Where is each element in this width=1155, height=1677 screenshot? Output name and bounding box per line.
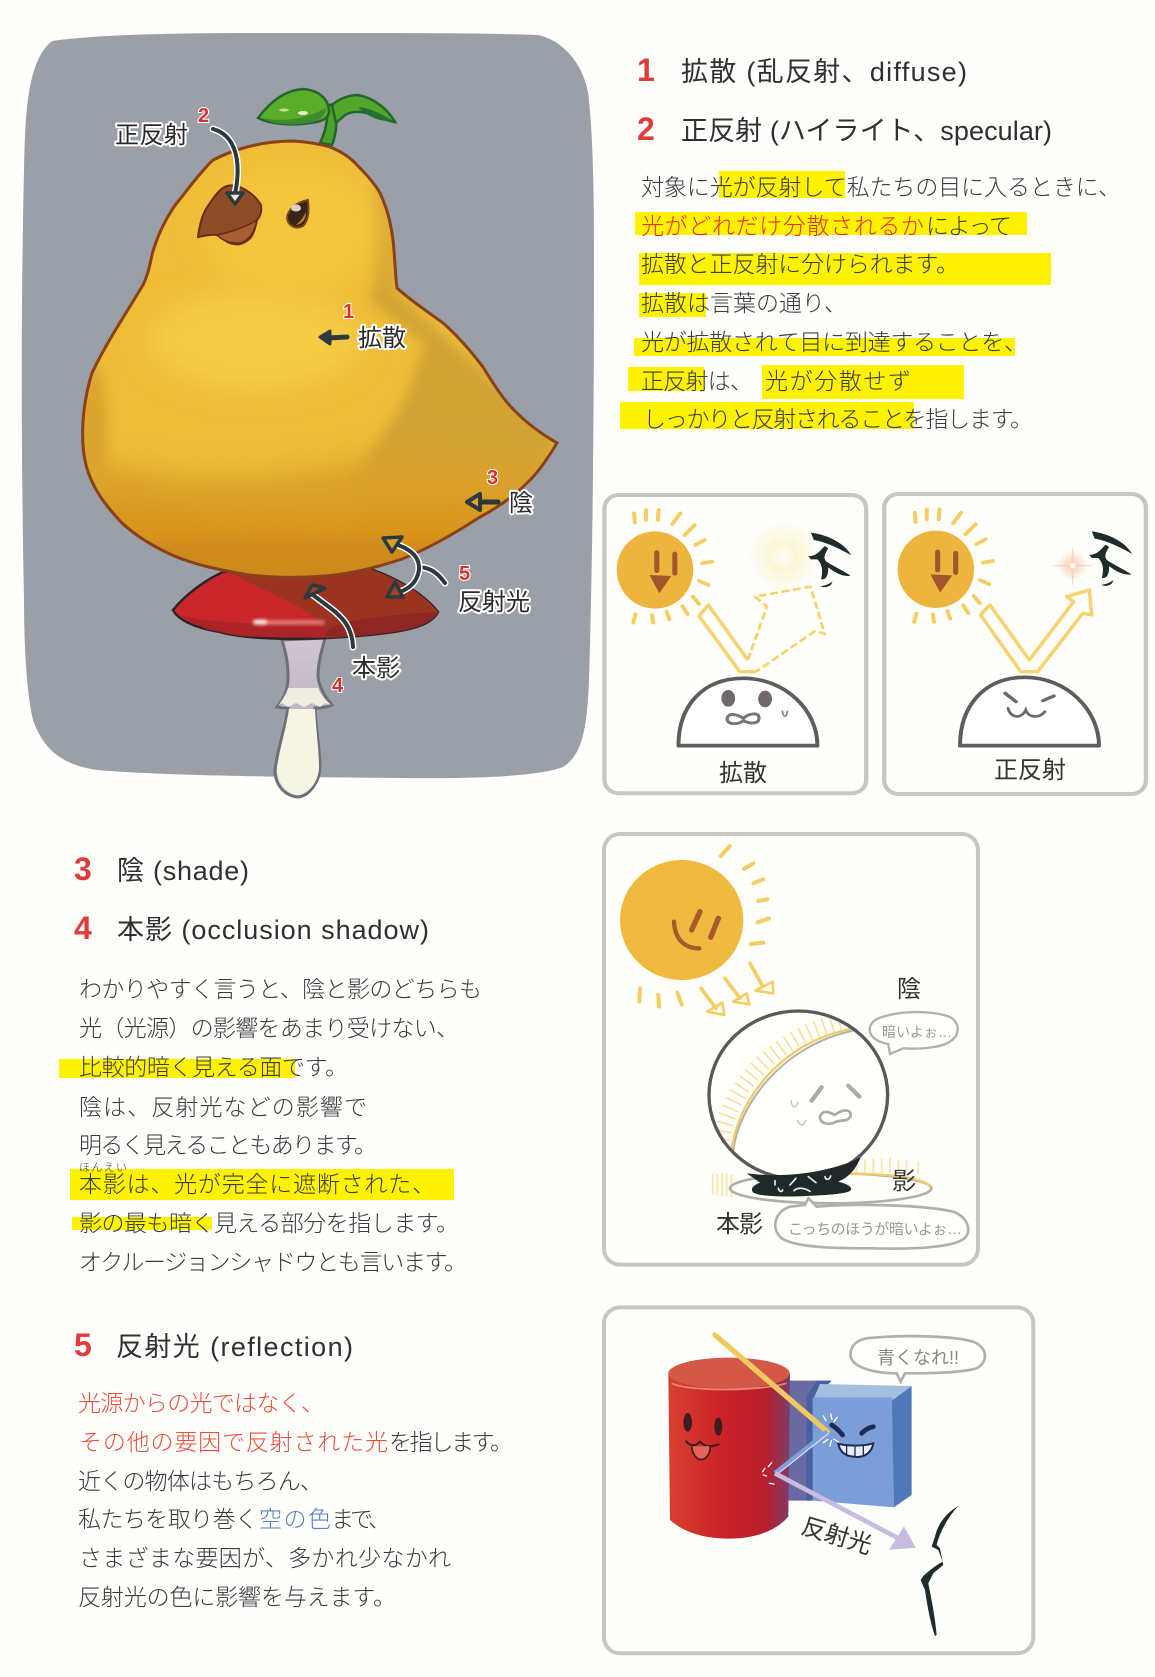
frame [604, 495, 866, 793]
label: 正反射 with arrow [115, 105, 243, 204]
caption: 正反射: 正反射 [994, 757, 1066, 784]
mushroom cap [173, 565, 445, 642]
label: 本影 with arrow [305, 585, 400, 697]
heading: 5 反射光: 5 [74, 1327, 92, 1363]
body text: オクルージョンシャドウとも言います。 [79, 1249, 467, 1275]
heading: 4 本影: 4 [74, 910, 92, 946]
floor shadow ellipse and hatching [713, 1158, 931, 1203]
heading: 3 陰: 陰 (shade) [117, 856, 249, 886]
panel: 正反射 diagram [884, 494, 1146, 794]
caption: 拡散: 拡散 [719, 760, 767, 787]
body text: 光が分散せず [765, 368, 911, 394]
text block: 陰 and 本影 [59, 851, 482, 1275]
label: 本影 with arrow: 4 [332, 675, 344, 697]
body text: によって [926, 213, 1012, 239]
label: 拡散 with arrow [320, 301, 406, 352]
body text: 正反射は、 [641, 368, 753, 394]
speech bubble: 青くなれ [850, 1336, 985, 1382]
body text: 対象に光が反射して私たちの目に入るときに、 [641, 174, 1121, 200]
bubble text: 青くなれ: 青くなれ!! [877, 1348, 959, 1368]
panel: 拡散 diagram [604, 495, 866, 793]
body text: 反射光の色に影響を与えます。 [78, 1584, 396, 1610]
sprout [258, 89, 395, 145]
light arrow with dashed scatter [699, 587, 825, 672]
body text: 拡散と正反射に分けられます。 [641, 251, 959, 277]
speech bubble: 暗いよぉ [870, 1012, 958, 1054]
dome character [960, 677, 1099, 746]
reflection arrow [981, 590, 1092, 672]
beak [198, 185, 261, 244]
label: 陰 with arrow [467, 467, 533, 517]
label: 正反射 with arrow: 正反射 [115, 122, 188, 149]
label: 影: 影 [892, 1168, 916, 1195]
gray backdrop [22, 33, 594, 778]
frame [884, 494, 1146, 794]
yellow highlights [620, 171, 1051, 429]
body text: 本影は、光が完全に遮断された、 [79, 1171, 435, 1197]
label: 拡散 with arrow: 1 [343, 301, 354, 323]
body text: 近くの物体はもちろん、 [78, 1468, 323, 1494]
body text: ほんえい [79, 1161, 127, 1174]
heading: 4 本影: 本影 (occlusion shadow) [117, 915, 429, 945]
body text [641, 174, 1121, 432]
diffuse glow [747, 520, 819, 593]
round character [709, 1011, 888, 1179]
heading: 3 陰 [74, 851, 249, 887]
label: 反射光 with arrows [383, 537, 530, 616]
occlusion shadow [747, 1157, 861, 1196]
body text: さまざまな要因が、多かれ少なかれ [79, 1545, 451, 1571]
heading: 1 拡散: 拡散 (乱反射、diffuse) [681, 57, 967, 87]
body text [78, 1390, 513, 1610]
yellow highlights [59, 1059, 454, 1230]
heading: 2 正反射: 正反射 (ハイライト、specular) [681, 116, 1052, 146]
label: 本影 with arrow: 本影 [352, 655, 400, 682]
label: 反射光 with arrows: 反射光 [458, 589, 530, 616]
eye [287, 200, 308, 228]
body text: 陰は、反射光などの影響で [79, 1094, 367, 1120]
body text: 空の色 [259, 1506, 331, 1532]
blue box [788, 1381, 912, 1507]
body text: まで、 [331, 1506, 391, 1532]
frame [604, 834, 978, 1265]
body text [79, 976, 482, 1275]
red cylinder [668, 1358, 790, 1539]
body text: 影の最も暗く見える部分を指します。 [79, 1210, 459, 1236]
eye icon [1089, 531, 1132, 586]
reflected light path [715, 1335, 915, 1549]
label: 拡散 with arrow: 拡散 [358, 325, 406, 352]
label: 陰 with arrow: 陰 [509, 490, 533, 517]
mushroom stem [275, 638, 332, 797]
body text: を指します。 [389, 1429, 513, 1455]
bubble text: こっちのほうが暗いよぉ: こっちのほうが暗いよぉ… [788, 1221, 962, 1238]
eye icon [808, 533, 851, 587]
speech bubble: こっちのほうが暗いよぉ [775, 1198, 968, 1249]
body text: 光源からの光ではなく、 [78, 1390, 324, 1416]
body text: 比較的暗く見える面です。 [79, 1054, 348, 1080]
body text: 光（光源）の影響をあまり受けない、 [79, 1015, 459, 1041]
body text: わかりやすく言うと、陰と影のどちらも [79, 976, 482, 1002]
heading: 2 正反射: 2 [637, 111, 655, 147]
heading: 1 拡散: 1 [637, 52, 655, 88]
body text: 光が拡散されて目に到達することを、 [641, 329, 1027, 355]
body text: 拡散は言葉の通り、 [641, 290, 847, 316]
label: 陰: 陰 [897, 976, 921, 1003]
body text: しっかりと反射されることを指します。 [643, 406, 1033, 432]
label: 正反射 with arrow: 2 [198, 105, 209, 127]
body text: その他の要因で反射された光 [79, 1429, 388, 1455]
body text: 明るく見えることもあります。 [79, 1132, 377, 1158]
text block: 反射光 [74, 1327, 513, 1610]
label: 反射光: 反射光 [798, 1513, 875, 1560]
eye icon [921, 1506, 958, 1636]
sun [617, 510, 712, 623]
sun [898, 509, 993, 622]
frame [604, 1307, 1033, 1653]
bird body [70, 141, 560, 600]
dome character [678, 678, 817, 746]
body text: 光がどれだけ分散されるか [641, 213, 924, 239]
bubble text: 暗いよぉ: 暗いよぉ… [882, 1024, 952, 1040]
panel: 反射光 diagram [604, 1307, 1033, 1653]
label: 本影: 本影 [716, 1211, 763, 1238]
heading: 5 反射光: 反射光 (reflection) [116, 1332, 353, 1362]
label: 陰 with arrow: 3 [487, 467, 498, 489]
panel: bird on mushroom illustration [22, 33, 594, 797]
heading: 3 陰: 3 [74, 851, 92, 887]
label: 反射光 with arrows: 5 [459, 563, 470, 585]
panel: 陰と本影 diagram [604, 834, 978, 1265]
sun light arrows [701, 963, 773, 1015]
sun [620, 846, 769, 1007]
specular star [1050, 545, 1095, 587]
text block: 拡散 and 正反射 [620, 52, 1121, 432]
body text: 私たちを取り巻く [78, 1506, 258, 1532]
